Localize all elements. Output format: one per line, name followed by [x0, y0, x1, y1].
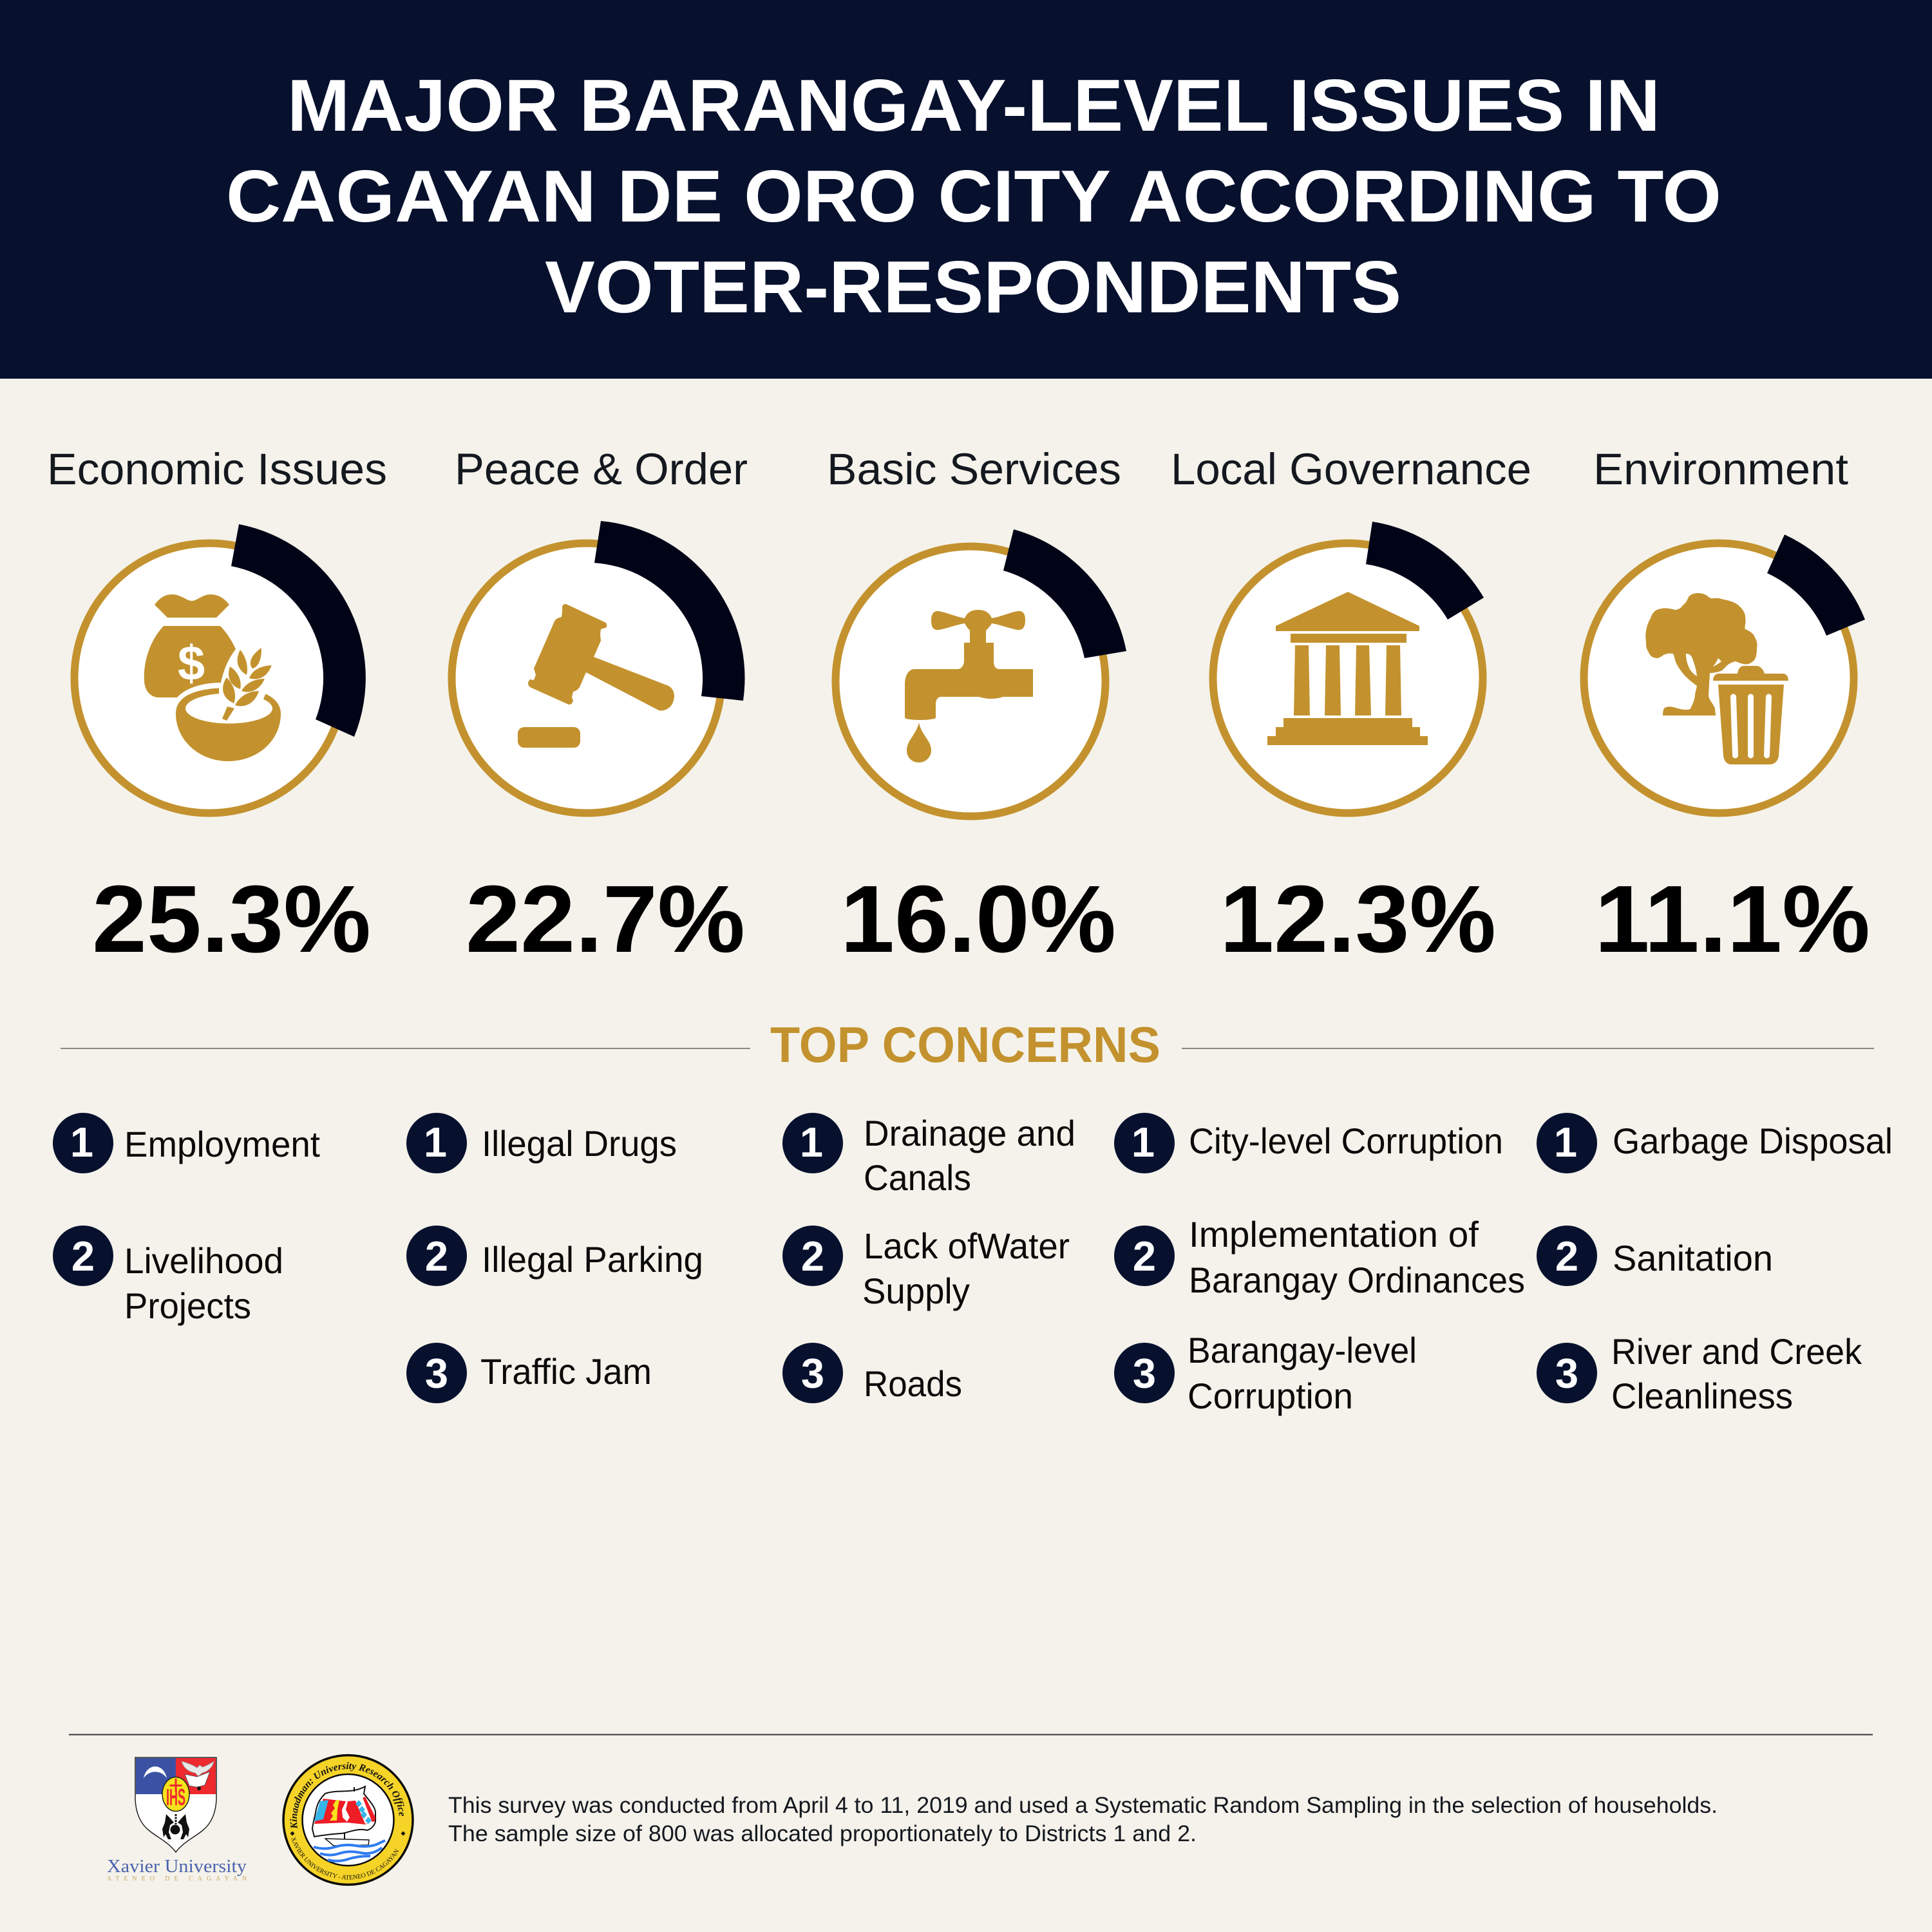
list: peace and order concerns — [406, 1113, 703, 1403]
ring: environment — [1584, 544, 1853, 813]
arc gauge: 22.7% — [594, 521, 745, 701]
heading: economic issues: Economic Issues — [47, 444, 387, 494]
header banner — [0, 0, 1932, 379]
icon: government building — [1267, 592, 1428, 745]
list: environment concerns: Sanitation — [1613, 1238, 1773, 1278]
arc gauge: 25.3% — [231, 524, 366, 737]
list: economic issues concerns: Projects — [124, 1285, 251, 1326]
logo: Kinaadman University Research Office seal: Kinaadman: University Research Office — [290, 1762, 404, 1829]
list: environment concerns: Garbage Disposal — [1613, 1121, 1893, 1161]
icon: tree and trash can — [1645, 593, 1788, 764]
heading: local governance: Local Governance — [1171, 444, 1531, 494]
list: environment concerns: 2 — [1555, 1233, 1578, 1280]
footnote: survey methodology: The sample size of 800 was allocated proportionately to Districts 1 and 2. — [448, 1821, 1197, 1846]
panel: environment — [1584, 444, 1870, 972]
heading: peace and order: Peace & Order — [455, 444, 748, 494]
list: local governance concerns — [1114, 1113, 1525, 1416]
arc gauge: 11.1% — [1767, 535, 1865, 636]
panel: economic issues — [47, 444, 387, 972]
percentage: local governance: 12.3% — [1220, 866, 1496, 972]
list: peace and order concerns: 3 — [425, 1350, 448, 1397]
list: local governance concerns: 1 — [1132, 1119, 1155, 1166]
list: peace and order concerns: Illegal Parking — [482, 1239, 703, 1280]
list: local governance concerns: 3 — [1133, 1350, 1156, 1397]
list: economic issues concerns — [53, 1113, 320, 1326]
logo: Xavier University: IHS — [166, 1784, 185, 1810]
icon: money bag and bowl — [144, 594, 281, 761]
list: local governance concerns: 2 — [1133, 1233, 1156, 1280]
list: environment concerns: 1 — [1554, 1119, 1577, 1166]
list: basic services concerns: 2 — [801, 1233, 824, 1280]
title: VOTER-RESPONDENTS — [545, 247, 1401, 328]
icon: money bag and bowl: $ — [178, 636, 205, 691]
arc gauge: 12.3% — [1366, 522, 1484, 620]
logo: Xavier University: Xavier University — [107, 1856, 247, 1877]
list: basic services concerns: Supply — [862, 1271, 970, 1311]
list: local governance concerns: City-level Corruption — [1189, 1121, 1503, 1161]
list: peace and order concerns: 2 — [425, 1233, 448, 1280]
list: environment concerns: 3 — [1555, 1350, 1578, 1397]
footnote: survey methodology — [448, 1793, 1718, 1846]
title: MAJOR BARANGAY-LEVEL ISSUES IN — [287, 65, 1660, 147]
title — [226, 65, 1721, 328]
logo: Xavier University — [107, 1757, 247, 1882]
list: economic issues concerns: Employment — [124, 1124, 320, 1164]
list: basic services concerns: Lack ofWater — [864, 1226, 1070, 1266]
list: basic services concerns: Canals — [864, 1157, 971, 1198]
list: environment concerns: Cleanliness — [1611, 1376, 1793, 1416]
percentage: economic issues: 25.3% — [92, 866, 371, 972]
arc gauge: 16.0% — [1003, 529, 1126, 658]
ring: basic services — [836, 546, 1105, 817]
logo: Xavier University: ATENEO DE CAGAYAN — [107, 1875, 247, 1882]
heading: basic services: Basic Services — [827, 444, 1121, 494]
ring: economic issues — [75, 544, 344, 813]
list: basic services concerns: Roads — [864, 1363, 962, 1404]
percentage: peace and order: 22.7% — [466, 866, 745, 972]
panel: basic services — [827, 444, 1126, 972]
list: peace and order concerns: 1 — [424, 1119, 447, 1166]
list: peace and order concerns: Illegal Drugs — [482, 1123, 677, 1164]
list: local governance concerns: Barangay Ordinances — [1189, 1260, 1525, 1300]
list: peace and order concerns: Traffic Jam — [480, 1351, 652, 1392]
list: environment concerns — [1537, 1113, 1893, 1416]
list: basic services concerns — [782, 1113, 1075, 1404]
logo: Kinaadman University Research Office seal — [282, 1754, 414, 1886]
footnote: survey methodology: This survey was conducted from April 4 to 11, 2019 and used a Systematic Random Sampling in the selection of households. — [448, 1793, 1718, 1818]
list: economic issues concerns: 2 — [71, 1233, 95, 1280]
panel: peace and order — [452, 444, 748, 972]
heading: environment: Environment — [1593, 444, 1848, 494]
percentage: environment: 11.1% — [1595, 866, 1870, 972]
heading: top concerns: TOP CONCERNS — [770, 1016, 1160, 1073]
list: environment concerns: River and Creek — [1611, 1331, 1862, 1372]
icon: water tap — [905, 610, 1033, 762]
list: basic services concerns: 3 — [801, 1350, 824, 1397]
list: economic issues concerns: Livelihood — [124, 1240, 283, 1281]
list: local governance concerns: Barangay-level — [1188, 1330, 1417, 1370]
list: economic issues concerns: 1 — [70, 1119, 93, 1166]
list: basic services concerns: 1 — [800, 1119, 823, 1166]
ring: peace and order — [452, 544, 721, 813]
list: local governance concerns: Corruption — [1188, 1376, 1353, 1416]
list: basic services concerns: Drainage and — [864, 1113, 1075, 1153]
icon: gavel — [518, 604, 674, 748]
panel: local governance — [1171, 444, 1531, 972]
percentage: basic services: 16.0% — [840, 866, 1116, 972]
list: local governance concerns: Implementation of — [1189, 1214, 1479, 1255]
logo: Kinaadman University Research Office seal: XAVIER UNIVERSITY - ATENEO DE CAGAYAN — [291, 1837, 399, 1879]
title: CAGAYAN DE ORO CITY ACCORDING TO — [226, 156, 1721, 238]
ring: local governance — [1213, 544, 1482, 813]
